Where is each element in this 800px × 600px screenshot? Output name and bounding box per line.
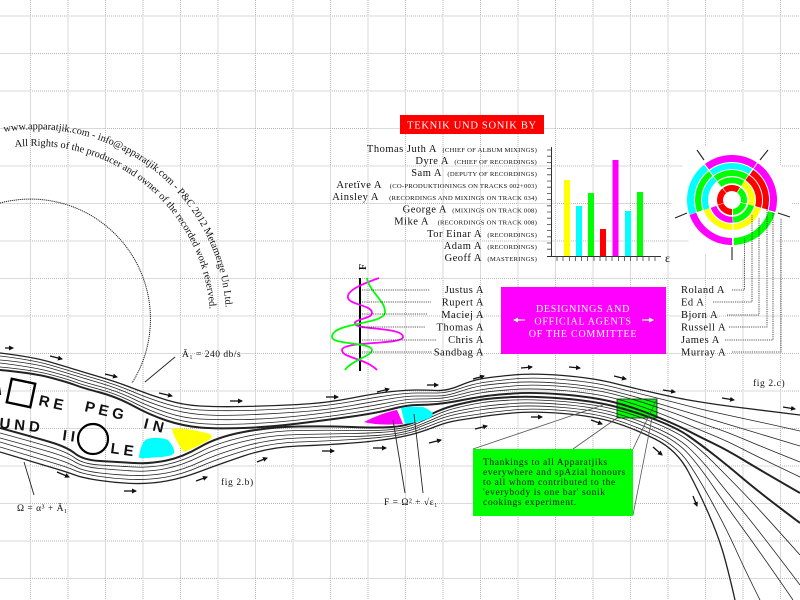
round hole text: lower words: II bbox=[61, 427, 80, 446]
callout: thankings: Thankings to all Apparatjiks bbox=[483, 458, 608, 468]
round hole text: circle shape bbox=[78, 424, 108, 454]
credits list: Thomas Juth A bbox=[367, 144, 437, 155]
stream lines bbox=[0, 353, 800, 600]
left name list: Thomas A bbox=[437, 322, 484, 334]
circular chart bbox=[674, 142, 790, 258]
credits list: (CHIEF OF ALBUM MIXINGS) bbox=[442, 147, 537, 154]
credits list: Tor Einar A bbox=[427, 229, 482, 240]
credits list: (DEPUTY OF RECORDINGS) bbox=[447, 171, 537, 178]
credits list: Aretïve A bbox=[336, 180, 382, 191]
blobs in left channel bbox=[139, 428, 212, 458]
figure label b: fig 2.b) bbox=[221, 477, 254, 488]
credits list: (CHIEF OF RECORDINGS) bbox=[454, 159, 537, 166]
heading: teknik und sonik by: TEKNIK UND SONIK BY bbox=[407, 120, 537, 132]
right name list: Roland A bbox=[681, 285, 725, 296]
panel: designings and official agents: OF THE COMMITTEE bbox=[529, 329, 637, 340]
credits list: Mike A bbox=[394, 216, 429, 228]
round hole text: lower words bbox=[0, 415, 139, 461]
formula: omega: Ω = α³ + Ā₁ bbox=[17, 503, 68, 514]
credits list: (RECORDINGS AND MIXINGS ON TRACK 034) bbox=[389, 195, 537, 202]
left name list: Sandbag A bbox=[434, 348, 484, 358]
flow arrows bbox=[5, 348, 795, 506]
wave axis label: F bbox=[358, 264, 369, 270]
callout: thankings: to all whom contributed to the bbox=[483, 478, 616, 488]
credits list: (MASTERINGS) bbox=[487, 256, 537, 263]
right name list: Murray A bbox=[681, 348, 726, 358]
square peg text: upper words: IN bbox=[142, 415, 170, 438]
square peg text: upper words: PEG bbox=[83, 398, 129, 425]
leader lines and formulas bbox=[24, 357, 423, 495]
credits list: George A bbox=[403, 204, 447, 216]
figure label c: fig 2.c) bbox=[753, 378, 785, 389]
callout: thankings: cookings experiment. bbox=[483, 498, 577, 508]
bar chart: ε bbox=[665, 251, 670, 265]
left name list: Maciej A bbox=[441, 310, 484, 321]
square peg text: square shape bbox=[7, 379, 35, 407]
curved credits text: All Rights of the producer and owner of the recorded work reserved. bbox=[14, 138, 216, 308]
formula: F: F = Ω² + √ε₁ bbox=[384, 497, 438, 508]
right name list: Ed A bbox=[681, 298, 704, 308]
left name list: Justus A bbox=[445, 285, 484, 296]
right name list bbox=[681, 285, 726, 358]
credits list: Sam A bbox=[411, 168, 442, 179]
right name list: Russell A bbox=[681, 322, 726, 334]
right name list: James A bbox=[681, 335, 720, 346]
dotted arc bbox=[0, 199, 150, 383]
round hole text: lower words: LE bbox=[109, 440, 139, 461]
credits list: (RECORDINGS) bbox=[487, 244, 537, 251]
credits list: Geoff A bbox=[445, 253, 482, 264]
credits list: Dyre A bbox=[415, 156, 449, 167]
curved credits text: www.apparatjik.com - info@apparatjik.com - P&C 2012 Metamerge Un Ltd. bbox=[3, 124, 232, 307]
callout connector lines bbox=[473, 399, 657, 515]
credits list: Adam A bbox=[444, 241, 482, 252]
square peg text: upper words: RE bbox=[37, 392, 69, 415]
left name list bbox=[434, 285, 484, 358]
formula: db/s: Ā₁ = 240 db/s bbox=[182, 349, 241, 360]
panel: designings and official agents: OFFICIAL AGENTS bbox=[534, 316, 632, 328]
green zoom rectangle bbox=[617, 399, 657, 418]
blobs in middle channel bbox=[364, 407, 433, 425]
right name list: Bjorn A bbox=[681, 310, 718, 321]
left name list: Chris A bbox=[448, 335, 484, 346]
panel: designings and official agents: DESIGNINGS AND bbox=[536, 304, 630, 315]
wave diagram bbox=[332, 264, 437, 371]
square peg text: upper words bbox=[0, 380, 170, 438]
credits list: Ainsley A bbox=[332, 192, 379, 203]
credits list: (RECORDINGS) bbox=[487, 232, 537, 239]
credits list: (CO-PRODUKTIONINGS ON TRACKS 002+003) bbox=[390, 183, 537, 190]
callout: thankings: 'everybody is one bar' sonik bbox=[483, 488, 606, 498]
credits list: (MIXINGS ON TRACK 008) bbox=[452, 208, 537, 214]
dotted leaders to circular chart bbox=[713, 205, 781, 352]
credits list bbox=[332, 144, 537, 264]
callout: thankings bbox=[473, 449, 633, 516]
heading: teknik und sonik by bbox=[400, 115, 544, 134]
left name list: Rupert A bbox=[442, 298, 484, 308]
circular chart ticks bbox=[675, 150, 790, 260]
panel: designings and official agents bbox=[501, 287, 666, 354]
bar chart bbox=[547, 147, 670, 265]
callout: thankings: everywhere and spAzial honours bbox=[483, 468, 626, 478]
credits list: (RECORDINGS ON TRACK 008) bbox=[438, 220, 537, 226]
